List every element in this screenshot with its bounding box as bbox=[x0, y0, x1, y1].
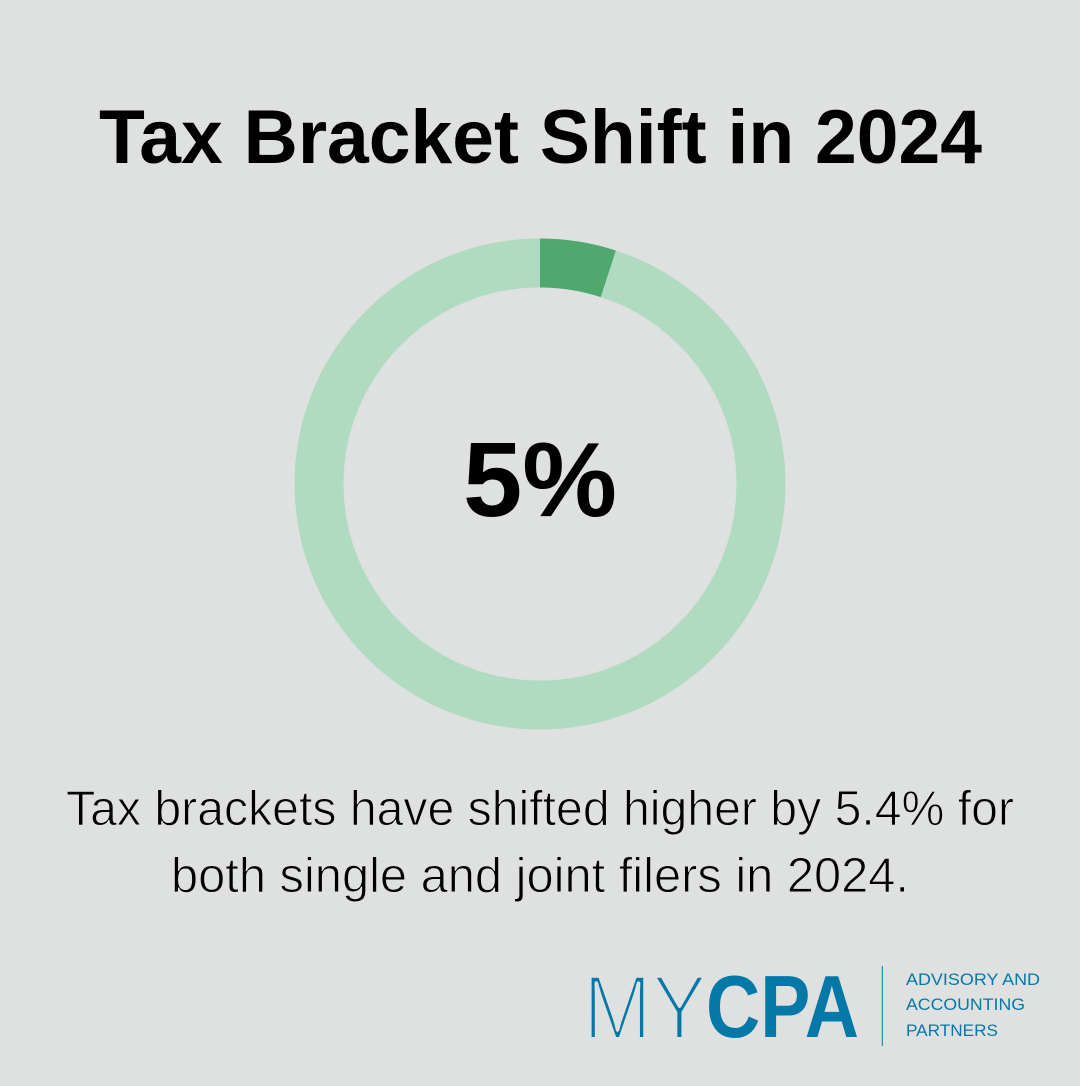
logo tagline: PARTNERS bbox=[906, 1021, 998, 1040]
description text: both single and joint filers in 2024. bbox=[171, 849, 909, 903]
center value: 5% bbox=[463, 421, 617, 539]
description text bbox=[66, 782, 1014, 903]
logo tagline: ACCOUNTING bbox=[906, 995, 1025, 1014]
title: Tax Bracket Shift in 2024 bbox=[99, 95, 982, 180]
donut highlighted segment 5% bbox=[540, 238, 616, 297]
logo tagline: ADVISORY AND bbox=[906, 970, 1040, 989]
donut chart bbox=[319, 238, 761, 705]
logo tagline bbox=[906, 970, 1040, 1040]
logo wordmark bbox=[583, 957, 859, 1059]
logo divider bbox=[882, 966, 883, 1046]
donut track bbox=[319, 263, 761, 705]
logo wordmark: MY bbox=[583, 957, 707, 1059]
logo bbox=[583, 957, 1040, 1059]
description text: Tax brackets have shifted higher by 5.4% for bbox=[66, 782, 1014, 836]
logo wordmark: CPA bbox=[706, 957, 859, 1056]
